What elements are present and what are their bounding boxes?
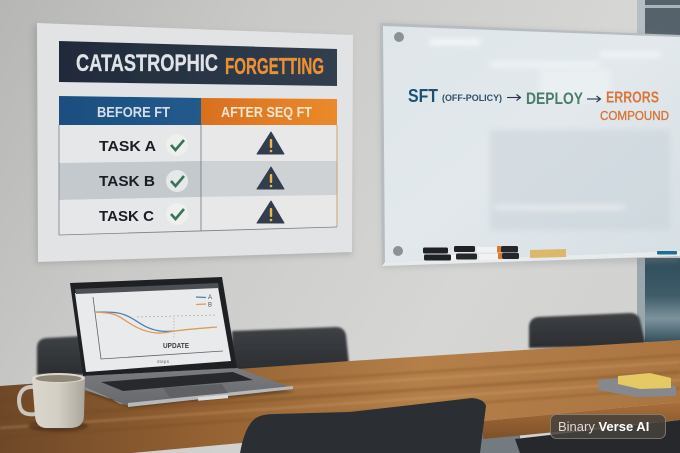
- flow text: deploy: DEPLOY: [526, 89, 584, 108]
- table front edge: [483, 402, 680, 439]
- flow text: off-policy: (OFF-POLICY): [442, 93, 502, 104]
- row: task a: TASK A: [99, 138, 156, 155]
- board reflections: [430, 40, 670, 230]
- laptop shadow: [85, 384, 295, 408]
- line chart: [93, 295, 223, 364]
- table: [0, 340, 680, 453]
- marker tray: [382, 251, 680, 266]
- arrow to deploy: [507, 94, 520, 100]
- poster title banner: FORGETTING: [225, 53, 324, 79]
- laptop lid: [70, 277, 237, 376]
- legend: A: [208, 295, 212, 301]
- row: task c: [99, 201, 284, 225]
- coffee mug: [19, 373, 88, 432]
- blue marker: [657, 251, 677, 254]
- keyboard: [101, 372, 253, 391]
- arrow to errors: [587, 96, 600, 102]
- header: after seq ft: AFTER SEQ FT: [221, 105, 312, 121]
- whiteboard: [380, 23, 680, 268]
- update label: UPDATE: [163, 343, 189, 350]
- eraser: [530, 249, 566, 258]
- chart axes: [93, 297, 223, 359]
- poster: catastrophic forgetting: [33, 23, 353, 264]
- legend: B: [208, 302, 212, 308]
- pin top: [394, 32, 404, 42]
- header: before ft: BEFORE FT: [97, 105, 170, 121]
- window: [637, 0, 680, 342]
- curve a: [95, 312, 175, 331]
- foreground chair: [240, 398, 486, 453]
- laptop screen: [75, 287, 231, 372]
- dashed reference line: [137, 315, 217, 317]
- row: task b: [99, 167, 284, 192]
- poster title banner: [59, 41, 337, 86]
- poster title banner: CATASTROPHIC: [76, 50, 218, 77]
- dark chair under table right: [515, 420, 680, 453]
- floor gap: [480, 430, 520, 453]
- watermark: binary verse ai: Binary Verse AI: [558, 419, 649, 434]
- notebook under laptop: [85, 384, 128, 405]
- book: [598, 378, 676, 397]
- row: task b: TASK B: [99, 173, 155, 190]
- background chair left: [37, 327, 349, 375]
- legend: [196, 295, 212, 308]
- header: after seq ft: [201, 98, 337, 125]
- curve b: [95, 312, 217, 333]
- pin bottom: [393, 246, 403, 256]
- flow text: compound: COMPOUND: [600, 109, 669, 123]
- comparison table: [59, 96, 337, 235]
- sticky notes: [618, 373, 671, 389]
- flow text: sft: SFT: [408, 85, 439, 106]
- row: task a: [99, 132, 284, 156]
- flow text: errors: ERRORS: [606, 90, 659, 106]
- watermark: binary verse ai: [550, 414, 666, 438]
- row: task c: TASK C: [99, 208, 154, 225]
- table top: [0, 340, 680, 453]
- laptop base: [83, 368, 293, 406]
- steps label: steps: [157, 359, 170, 364]
- update marker: [173, 318, 175, 338]
- trackpad: [163, 384, 228, 398]
- background chair right: [529, 313, 646, 348]
- laptop: [70, 277, 295, 408]
- header: before ft: [59, 96, 201, 125]
- markers: [423, 246, 519, 260]
- stacked book and sticky notes: [598, 373, 676, 397]
